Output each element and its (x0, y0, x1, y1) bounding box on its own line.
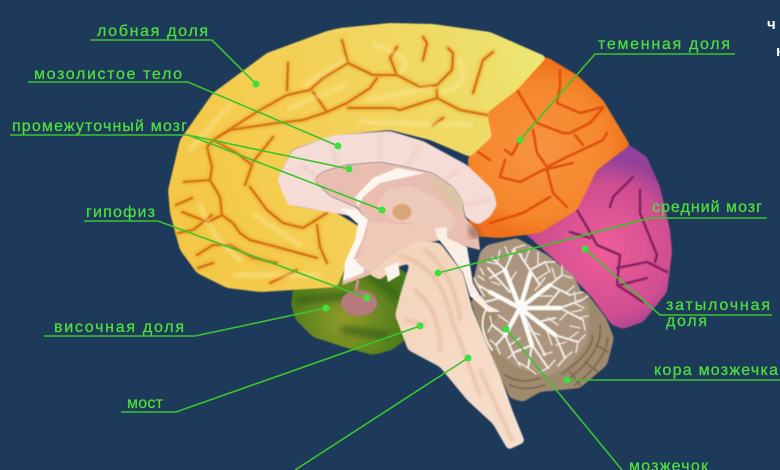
parietal sulci (478, 70, 607, 223)
label: mozolistoe telo: мозолистое тело (34, 66, 182, 83)
dark gap (468, 224, 482, 238)
frontal sulci (176, 37, 493, 283)
nucleus (392, 204, 412, 220)
label: kora mozzhechka (564, 362, 780, 384)
label: gipofiz: гипофиз (86, 204, 155, 221)
label: visochnaya dolya: височная доля (54, 319, 184, 336)
cerebellar cortex (470, 290, 614, 402)
label: lower pointer, medulla (295, 354, 472, 470)
fornix arch (355, 168, 425, 207)
label: lobnaya dolya: лобная доля (97, 23, 208, 40)
brainstem (368, 240, 525, 450)
parietal lobe (468, 57, 630, 238)
occipital sulci (570, 177, 667, 302)
label: promezhutochny mozg (10, 118, 386, 214)
clipped white text at right edge: ч (767, 16, 776, 33)
occipital lobe (500, 142, 672, 329)
label: most (121, 322, 424, 412)
label: kora mozzhechka: кора мозжечка (654, 362, 778, 379)
label: gipofiz (84, 204, 370, 302)
label: sredny mozg: средний мозг (652, 199, 762, 216)
label: temennaya dolya (516, 36, 735, 144)
label: visochnaya dolya (44, 304, 330, 336)
white strip by hypothalamus (340, 208, 368, 281)
label: zatylochnaya dolya: доля (666, 313, 707, 330)
callosum fibre texture (300, 134, 488, 205)
thalamus (377, 185, 457, 232)
label: promezhutochny mozg: промежуточный мозг (12, 118, 187, 135)
tectum white band (435, 227, 502, 312)
label: mozzhechok (502, 326, 709, 470)
beige band under callosum (425, 172, 463, 216)
label: temennaya dolya: теменная доля (598, 36, 730, 53)
hypothalamus (356, 222, 447, 272)
diencephalon (314, 162, 480, 285)
corpus callosum (277, 131, 497, 225)
temporal shading (300, 270, 395, 335)
temporal lobe (291, 268, 420, 355)
label: sredny mozg (434, 199, 767, 276)
cerebellum arbor (473, 238, 590, 376)
label: zatylochnaya dolya: затылочная (666, 297, 770, 314)
small white structures (385, 262, 400, 282)
label: mozolistoe telo (28, 66, 342, 150)
pituitary (341, 280, 377, 316)
label: most: мост (127, 395, 164, 412)
cortex folds (505, 325, 608, 388)
label: zatylochnaya dolya (582, 246, 772, 330)
frontal lobe (168, 23, 547, 292)
label: lobnaya dolya (90, 23, 260, 88)
brainstem fibres (400, 250, 512, 440)
frontal highlights (190, 45, 470, 275)
clipped white text at right edge (767, 16, 780, 60)
